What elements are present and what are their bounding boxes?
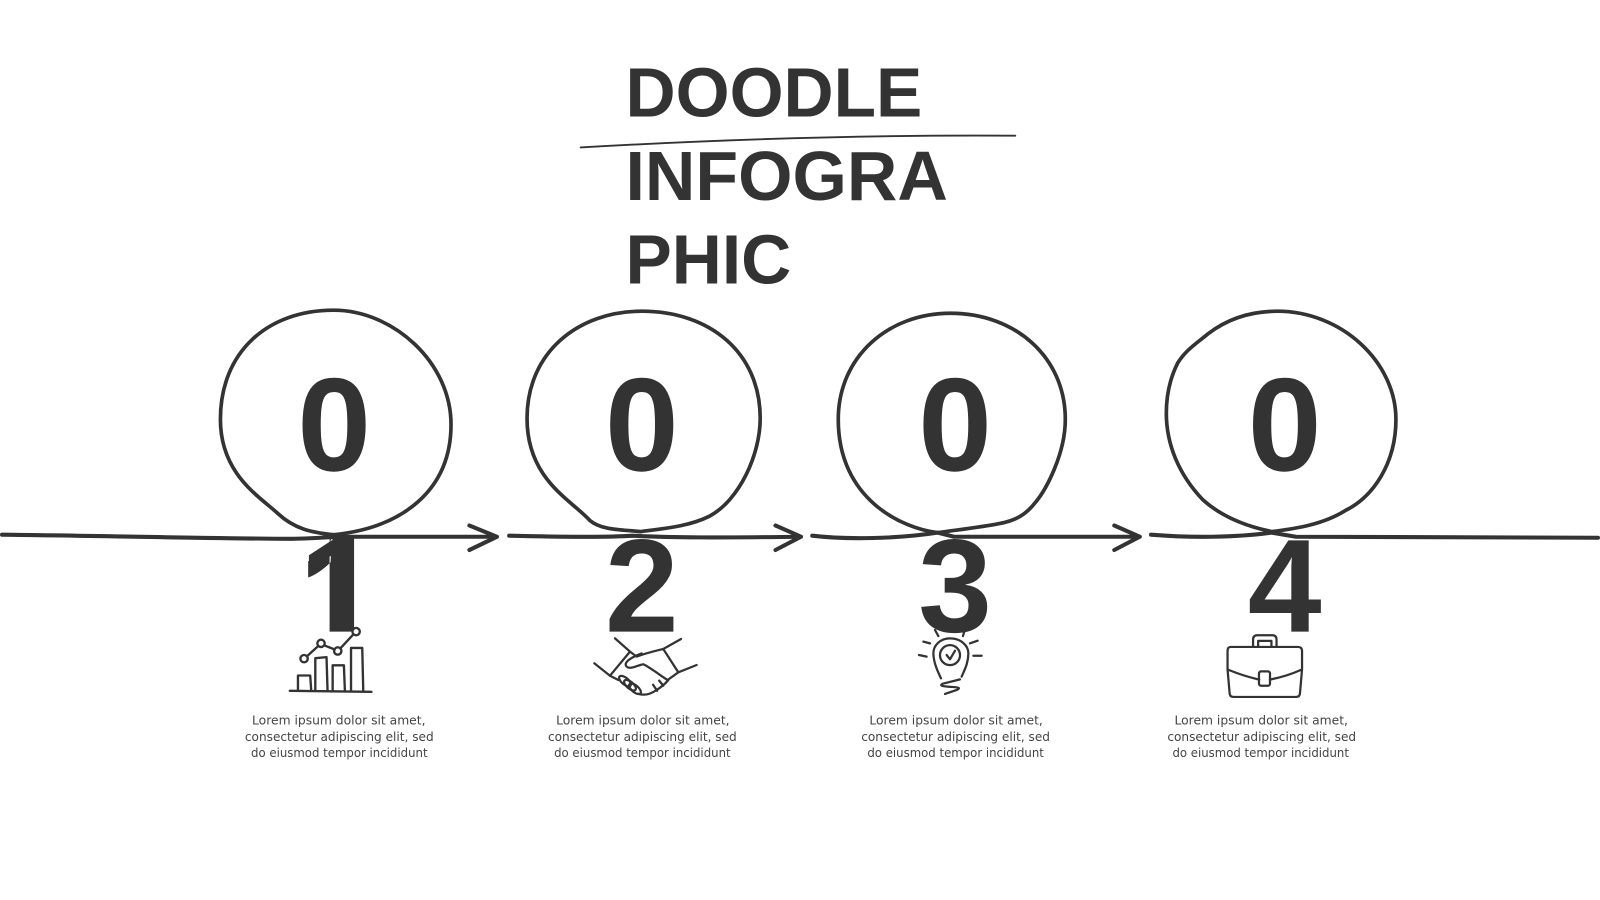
step 3 number: 0	[918, 351, 992, 499]
step 3	[812, 313, 1140, 761]
step 3 circle	[838, 313, 1065, 533]
step 1 description: Lorem ipsum dolor sit amet,	[252, 713, 426, 728]
step 4 description	[1167, 713, 1356, 761]
step 2 number: 0	[605, 351, 679, 499]
step 2 connector arrow	[509, 526, 801, 550]
step 3 connector arrow	[812, 526, 1140, 550]
step 3 description: do eiusmod tempor incididunt	[867, 746, 1044, 761]
step 1 number: 0	[297, 351, 371, 499]
step 2 description	[548, 713, 737, 761]
step 4 number: 0	[1248, 351, 1322, 499]
icon: bar chart	[290, 628, 371, 692]
step 1 number	[302, 378, 366, 632]
step 1 description	[245, 713, 434, 761]
icon: light bulb	[919, 630, 982, 694]
step 4 circle	[1166, 311, 1396, 532]
step 4 number	[1248, 351, 1322, 661]
step 4	[1151, 311, 1598, 761]
step 2 description: consectetur adipiscing elit, sed	[548, 730, 737, 745]
title	[626, 53, 948, 299]
step 3 description	[861, 713, 1050, 761]
step 3 number: 3	[918, 513, 992, 661]
step 2 description: Lorem ipsum dolor sit amet,	[556, 713, 730, 728]
step 4 description: Lorem ipsum dolor sit amet,	[1174, 713, 1348, 728]
step 4 description: do eiusmod tempor incididunt	[1172, 746, 1349, 761]
step 4 number: 4	[1248, 513, 1322, 661]
icon: briefcase	[1228, 635, 1302, 697]
title: INFOGRA	[626, 137, 948, 215]
icon: handshake	[594, 638, 697, 696]
step 2 number: 2	[605, 513, 679, 661]
step 1 description: do eiusmod tempor incididunt	[251, 746, 428, 761]
step 1 number: 1	[300, 513, 374, 661]
title underline	[581, 136, 1015, 147]
step 2 number	[605, 351, 679, 661]
step 4 description: consectetur adipiscing elit, sed	[1167, 730, 1356, 745]
step 1 connector arrow	[2, 526, 497, 550]
step 1 circle	[220, 310, 451, 535]
step 2 description: do eiusmod tempor incididunt	[554, 746, 731, 761]
title: DOODLE	[626, 53, 922, 131]
step 4 line	[1151, 533, 1598, 538]
title: PHIC	[626, 221, 791, 299]
step 3 description: Lorem ipsum dolor sit amet,	[869, 713, 1043, 728]
step 2	[509, 311, 801, 761]
step 3 number	[918, 351, 992, 661]
step 1	[2, 310, 497, 761]
step 3 description: consectetur adipiscing elit, sed	[861, 730, 1050, 745]
step 2 circle	[527, 311, 760, 532]
step 1 description: consectetur adipiscing elit, sed	[245, 730, 434, 745]
